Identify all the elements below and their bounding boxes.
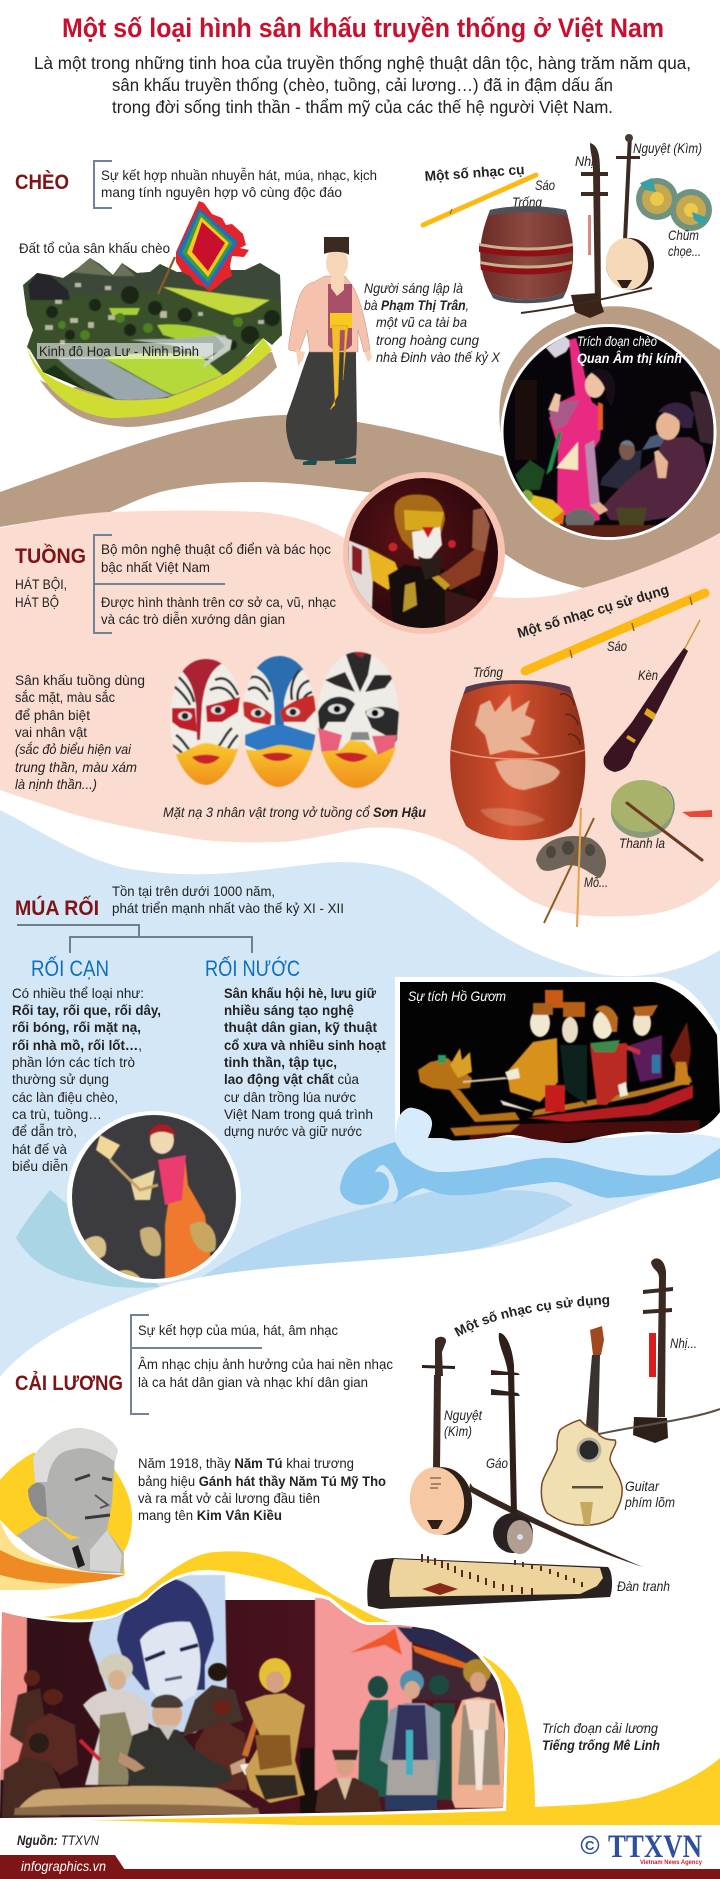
label: Nhị: Nhị [575, 153, 595, 169]
Múa rối description [112, 883, 344, 916]
background shape: blue water wave [340, 1142, 720, 1205]
text: sắc mặt: sắc mặt, màu sắc [15, 689, 115, 705]
logo: TTXVN: C [585, 1838, 595, 1853]
icon: trống drum [479, 206, 573, 303]
label: Sáo: Sáo [607, 638, 627, 654]
photo: Sự tích Hồ Gươm water puppets: Sự tích Hồ Gươm [408, 988, 506, 1004]
label: Một số nhạc cụ sử dụng (cải lương): Một số nhạc cụ sử dụng [454, 1296, 610, 1337]
text: sắc mặt: Sân khấu tuồng dùng [15, 672, 145, 688]
text: Rối nước list: cổ xưa và nhiều sinh hoạt [224, 1037, 386, 1053]
text: Năm Tú: và ra mắt vở cải lương đầu tiên [138, 1490, 320, 1506]
Cải lương bracket and description: Âm nhạc chịu ảnh hưởng của hai nền nhạc [138, 1356, 393, 1372]
tree connector [17, 925, 252, 953]
icon: đàn nhị [521, 143, 652, 318]
text: Năm Tú: Năm 1918, thầy Năm Tú khai trương [138, 1455, 354, 1471]
Tuồng bracket and description: Được hình thành trên cơ sở ca, vũ, nhạc [101, 594, 336, 610]
icon: water crest over photo [395, 1108, 720, 1176]
text: Người sáng lập: Người sáng lập là [364, 280, 463, 296]
intro text: sân khấu truyền thống (chèo, tuồng, cải lương…) đã in đậm dấu ấn [112, 75, 613, 95]
icon: sáo flute [423, 175, 536, 225]
title: Một số loại hình sân khấu truyền thống ở Việt Nam [62, 13, 664, 43]
Tuồng bracket and description: bậc nhất Việt Nam [101, 559, 210, 575]
background shape: teal swoosh [16, 1190, 160, 1288]
icon: mõ [536, 808, 606, 927]
heading: Múa rối: MÚA RỐI [15, 896, 99, 920]
landscape: Hoa Lư [20, 255, 285, 427]
label: Đàn tranh: Đàn tranh [617, 1578, 670, 1594]
label: Trống: Trống [473, 664, 503, 680]
text: Rối cạn list: Có nhiều thể loại như: [12, 985, 144, 1001]
text: Rối cạn list: ca trù, tuồng… [12, 1106, 102, 1122]
intro text: Là một trong những tinh hoa của truyền thống nghệ thuật dân tộc, hàng trăm năm qua, [34, 53, 691, 73]
label: Mõ: Mõ... [584, 874, 608, 890]
Chèo bracket and description: mang tính nguyên hợp vô cùng độc đáo [101, 184, 342, 200]
source: Nguồn: TTXVN [17, 1832, 100, 1848]
mask: red [170, 658, 242, 786]
text: Rối nước list [224, 985, 386, 1139]
intro text [34, 53, 691, 117]
icon: đàn tranh [367, 1554, 612, 1609]
icon: trống red drum [450, 680, 585, 840]
icon: chũm chọe [636, 178, 712, 231]
label: Nhị: Nhị... [670, 1335, 697, 1351]
text: sắc mặt: vai nhân vật [15, 724, 87, 740]
text: Rối cạn list: các làn điệu chèo, [12, 1089, 118, 1105]
Cải lương bracket and description [131, 1315, 393, 1414]
label: Guitar phím lõm [624, 1478, 675, 1510]
icon: thanh la [611, 780, 712, 860]
background shape: pink tuong panel [0, 510, 720, 917]
photo: Quan Âm thị kính [500, 320, 720, 545]
text: Năm Tú: bảng hiệu Gánh hát thầy Năm Tú Mỹ Tho [138, 1473, 386, 1489]
label: Kèn: Kèn [638, 667, 658, 683]
text: sắc mặt: (sắc đỏ biểu hiện vai [15, 741, 132, 757]
icon: đàn gáo [469, 1333, 643, 1567]
icon: đàn nhị [599, 1258, 720, 1443]
label: Thanh la: Thanh la [619, 835, 665, 851]
subheading: Hát bội: HÁT BỘ [15, 594, 59, 610]
text: Rối cạn list: biểu diễn [12, 1158, 68, 1174]
caption: Tiếng trống Mê Linh [542, 1720, 660, 1753]
text: sắc mặt: để phân biệt [15, 707, 90, 723]
label: Nguyệt (Kìm) [444, 1407, 483, 1439]
text: Rối nước list: thuật dân gian, kỹ thuật [224, 1019, 377, 1035]
caption: Tiếng trống Mê Linh: Tiếng trống Mê Linh [542, 1737, 660, 1753]
footer bar [0, 1855, 720, 1879]
photo: Sự tích Hồ Gươm water puppets [395, 977, 720, 1153]
photo: Quan Âm thị kính: Trích đoạn chèo [577, 333, 657, 349]
text: Rối nước list: lao động vật chất của [224, 1071, 359, 1087]
Cải lương bracket and description: là ca hát dân gian và nhạc khí dân gian [138, 1374, 368, 1390]
text: Người sáng lập: một vũ ca tài ba [376, 314, 467, 330]
subheading: Hát bội [15, 576, 67, 610]
label: Chũm chọe [668, 227, 701, 259]
logo: TTXVN [582, 1829, 703, 1866]
text: Năm Tú: mang tên Kim Vân Kiều [138, 1507, 282, 1523]
icon: festival flag [158, 201, 249, 294]
text: Rối nước list: Sân khấu hội hè, lưu giữ [224, 985, 377, 1001]
text: Rối cạn list: hát đế và [12, 1141, 67, 1157]
heading: Rối cạn: RỐI CẠN [31, 955, 109, 981]
heading: Chèo: CHÈO [15, 171, 69, 194]
caption: Tiếng trống Mê Linh: Trích đoạn cải lương [542, 1720, 658, 1736]
label: Một số nhạc cụ: Một số nhạc cụ [424, 161, 525, 184]
background shape: tan band [0, 306, 720, 588]
label: Nguyệt (Kìm): Nguyệt [444, 1407, 483, 1423]
photo: tuồng actor [340, 470, 510, 640]
photo: puppet with lotus [65, 1110, 245, 1290]
Tuồng bracket and description: và các trò diễn xướng dân gian [101, 611, 285, 627]
subheading: Hát bội: HÁT BỘI, [15, 576, 67, 592]
text: sắc mặt: là nịnh thần...) [15, 776, 97, 792]
photo: Tiếng trống Mê Linh [0, 1570, 510, 1821]
text: Rối nước list: dựng nước và giữ nước [224, 1123, 362, 1139]
portrait: thầy Năm Tú [0, 1428, 132, 1590]
icon: guitar [541, 1326, 622, 1525]
label: Sáo: Sáo [535, 177, 555, 193]
label: Chũm chọe: chọe... [668, 243, 701, 259]
text: Người sáng lập [364, 280, 501, 365]
icon: sáo [525, 593, 705, 671]
text: sắc mặt [15, 672, 145, 792]
text: Rối cạn list: phần lớn các tích trò [12, 1054, 135, 1070]
icon: kèn [603, 620, 700, 772]
logo: TTXVN: Vietnam News Agency [640, 1860, 703, 1866]
icon: đàn nguyệt [603, 134, 657, 293]
background shape: yellow frame [0, 1551, 720, 1825]
intro text: trong đời sống tinh thần - thẩm mỹ của các thế hệ người Việt Nam. [112, 97, 613, 117]
text: Người sáng lập: trong hoàng cung [376, 332, 479, 348]
text: Rối cạn list [12, 985, 161, 1174]
text: Rối nước list: Việt Nam trong quá trình [224, 1106, 373, 1122]
text: Rối nước list: tinh thần, tập tục, [224, 1054, 337, 1070]
heading: Rối nước: RỐI NƯỚC [205, 955, 300, 981]
text: Rối cạn list: Rối tay, rối que, rối dây, [12, 1002, 161, 1018]
text: Rối nước list: nhiều sáng tạo nghệ [224, 1002, 354, 1018]
label: Kinh đô: Kinh đô Hoa Lư - Ninh Bình [39, 343, 199, 359]
Chèo bracket and description: Sự kết hợp nhuần nhuyễn hát, múa, nhạc, kịch [101, 167, 377, 183]
background shape: blue mua roi panel [0, 810, 720, 1377]
text: Năm Tú [138, 1455, 386, 1523]
footer bar: infographics.vn [21, 1858, 106, 1874]
Tuồng bracket and description: Bộ môn nghệ thuật cổ điển và bác học [101, 541, 331, 557]
text: sắc mặt: trung thần, màu xám [15, 759, 137, 775]
text: Rối cạn list: rối nhà mồ, rối lốt…, [12, 1037, 142, 1053]
Tuồng bracket and description [94, 535, 336, 633]
text: Rối cạn list: để dẫn trò, [12, 1123, 77, 1139]
label: Nguyệt (Kìm): Nguyệt (Kìm) [633, 140, 702, 156]
text: Người sáng lập: nhà Đinh vào thế kỷ X [376, 349, 501, 365]
text: Rối cạn list: thường sử dụng [12, 1071, 109, 1087]
Múa rối description: Tồn tại trên dưới 1000 năm, [112, 883, 275, 899]
Múa rối description: phát triển mạnh nhất vào thế kỷ XI - XII [112, 900, 344, 916]
heading: Cải lương: CẢI LƯƠNG [15, 1372, 123, 1395]
figure: Phạm Thị Trân [286, 237, 372, 465]
mask: blue [242, 655, 316, 788]
label: Một số nhạc cụ sử dụng (tuồng): Một số nhạc cụ sử dụng [515, 581, 670, 641]
background shape: light wave swoosh [202, 1190, 573, 1277]
label: Guitar phím lõm: phím lõm [624, 1494, 675, 1510]
heading: Tuồng: TUỒNG [15, 544, 86, 568]
label: Trống: Trống [512, 194, 542, 210]
masks: 3 tuồng characters [165, 650, 401, 792]
icon: đàn nguyệt [406, 1337, 476, 1539]
Cải lương bracket and description: Sự kết hợp của múa, hát, âm nhạc [138, 1322, 338, 1338]
photo: Quan Âm thị kính: Quan Âm thị kính [577, 349, 682, 366]
Chèo bracket and description [94, 161, 377, 208]
label: Đất tổ: Đất tổ của sân khấu chèo [19, 240, 170, 256]
label: Chũm chọe: Chũm [668, 227, 699, 243]
text: Rối cạn list: rối bóng, rối mặt nạ, [12, 1019, 141, 1035]
text: Người sáng lập: bà Phạm Thị Trân, [364, 297, 469, 313]
label: Gáo: Gáo [486, 1455, 508, 1471]
mask: black [315, 650, 401, 792]
caption: mặt nạ: Mặt nạ 3 nhân vật trong vở tuồng cổ Sơn Hậu [163, 804, 426, 820]
text: Rối nước list: cư dân trồng lúa nước [224, 1089, 356, 1105]
label: Guitar phím lõm: Guitar [625, 1478, 660, 1494]
label: Nguyệt (Kìm): (Kìm) [444, 1423, 472, 1439]
